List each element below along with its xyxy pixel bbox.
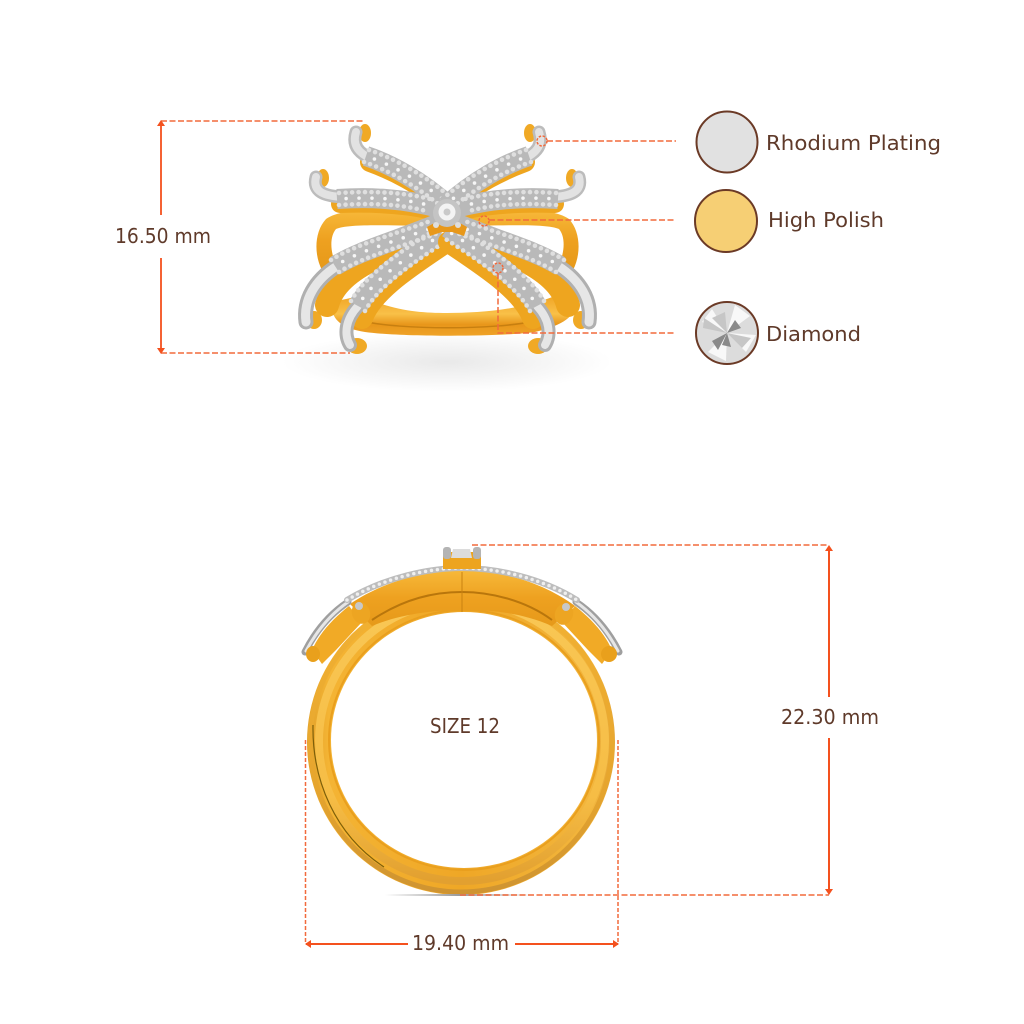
top stone setting xyxy=(443,547,481,569)
legend: diamond xyxy=(696,302,861,364)
floor line xyxy=(385,894,535,896)
height dimension: 22.30 mm xyxy=(460,545,879,895)
band groove xyxy=(362,321,535,328)
right arms xyxy=(444,124,589,354)
legend: high polish xyxy=(695,190,884,252)
floor shadow xyxy=(282,332,612,392)
legend: diamond: Diamond xyxy=(766,322,861,346)
width dimension: 19.40 mm xyxy=(305,740,619,955)
leader: diamond xyxy=(493,263,676,333)
legend: rhodium plating xyxy=(696,112,941,172)
height dimension: 16.50 mm: 16.50 mm xyxy=(115,224,211,248)
width dimension: 19.40 mm: 19.40 mm xyxy=(412,931,509,955)
silver edges xyxy=(305,568,619,652)
arch shading xyxy=(372,592,552,620)
upper arch xyxy=(350,570,575,626)
centre stone xyxy=(433,199,461,228)
lower band xyxy=(332,296,575,336)
legend: high polish: High Polish xyxy=(768,208,884,232)
right arm segment xyxy=(562,606,612,664)
left arms xyxy=(306,124,451,354)
left arm segment xyxy=(312,606,362,664)
height dimension: 16.50 mm xyxy=(115,120,365,354)
leader: rhodium plating xyxy=(537,136,676,146)
knobs xyxy=(306,600,617,662)
legend: rhodium plating: Rhodium Plating xyxy=(766,131,941,155)
shank shading xyxy=(310,592,612,892)
centre gold setting xyxy=(427,222,467,236)
ring shank xyxy=(307,589,615,895)
upper shanks xyxy=(316,210,432,270)
height dimension: 22.30 mm: 22.30 mm xyxy=(781,705,879,729)
leader: high polish xyxy=(479,216,676,226)
front view ring xyxy=(305,547,619,896)
size label: SIZE 12 xyxy=(430,714,500,738)
top view ring xyxy=(282,124,612,392)
